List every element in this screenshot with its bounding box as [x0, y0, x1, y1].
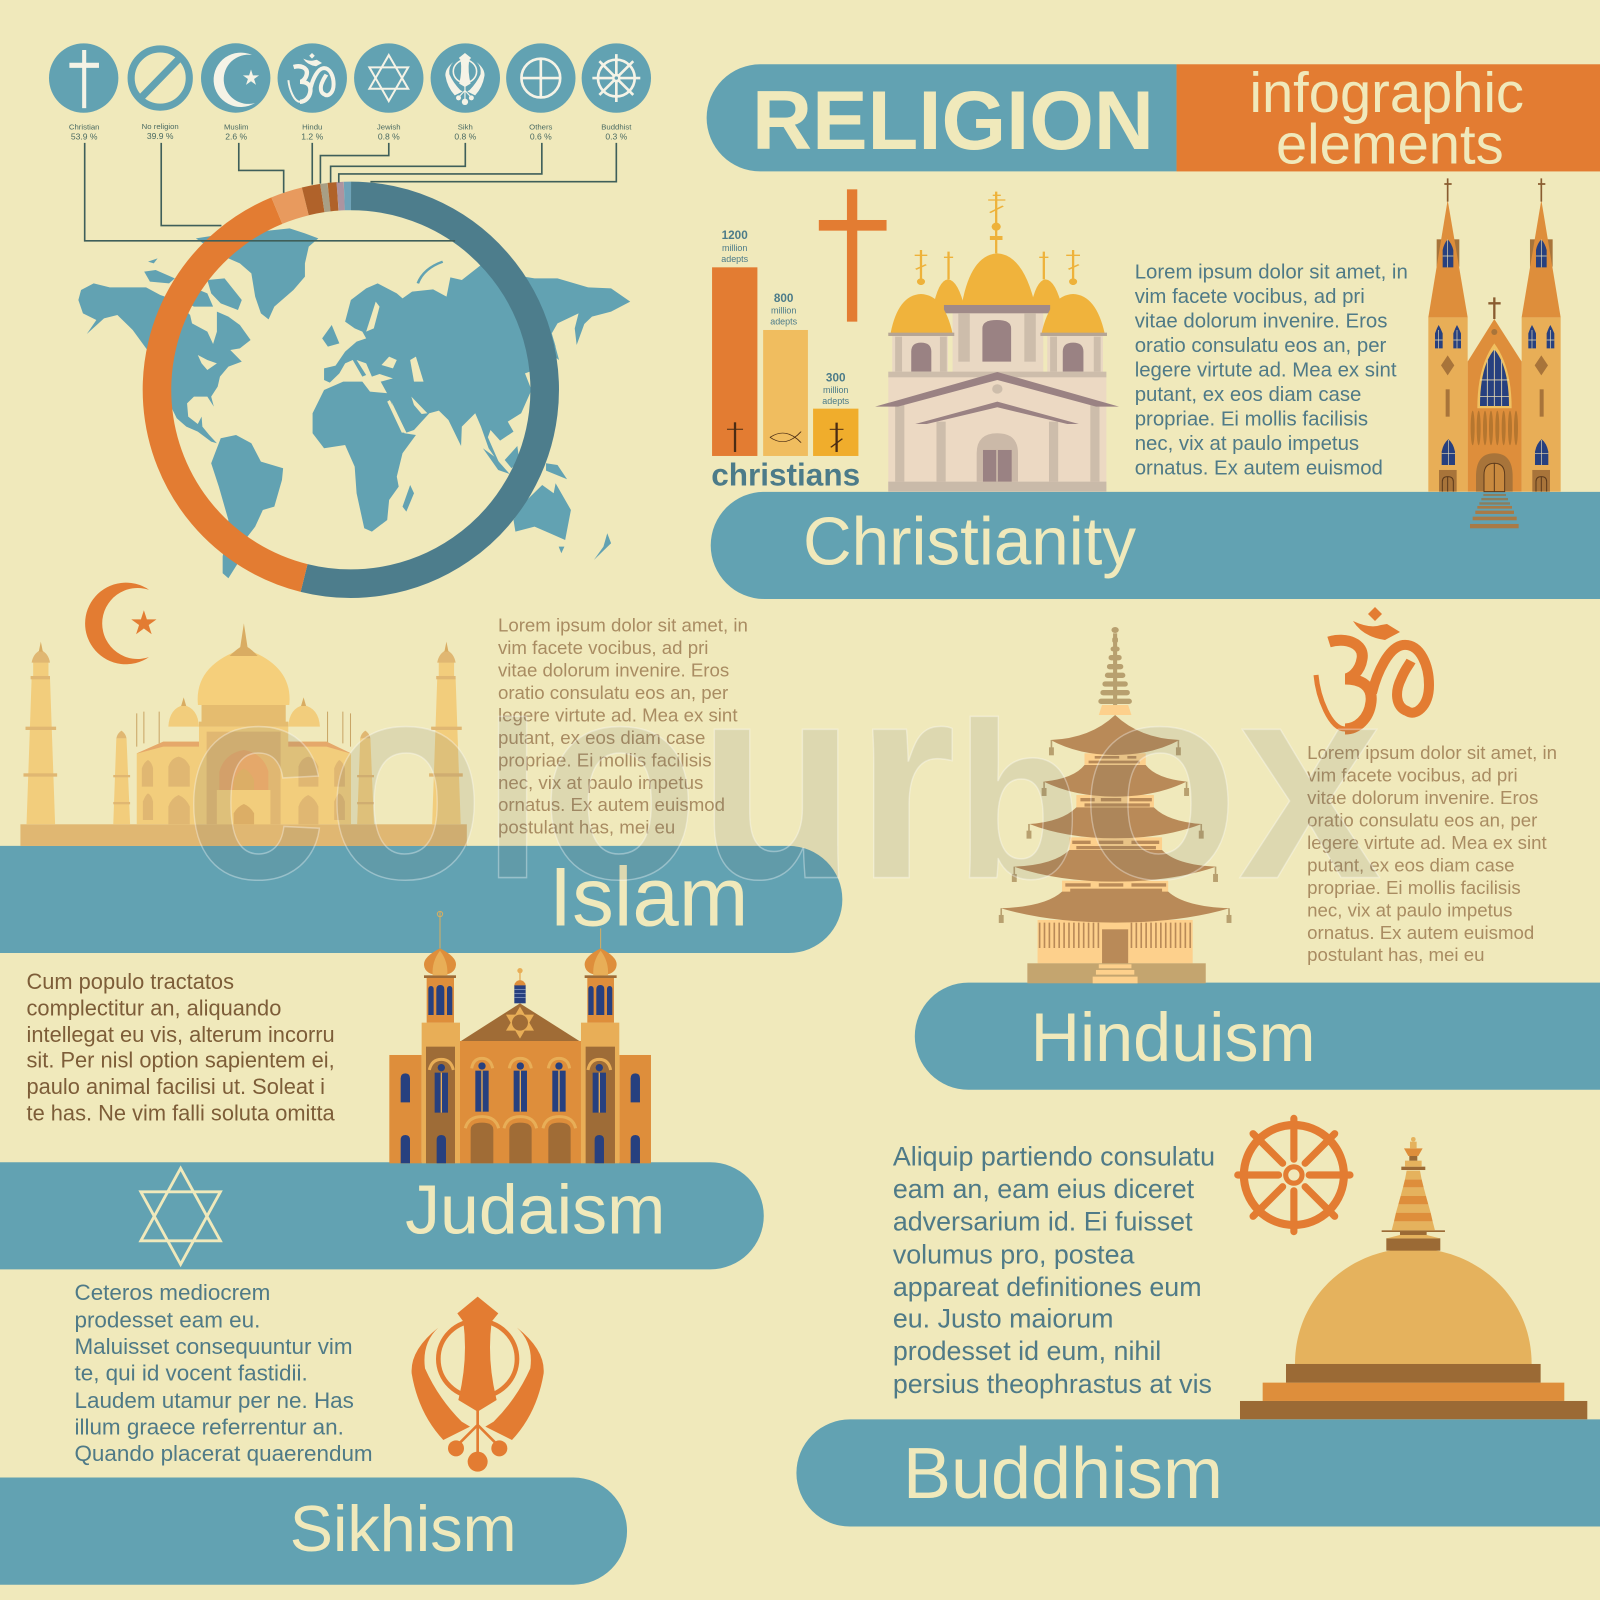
band: Islam [0, 846, 842, 953]
icon: khanda large [412, 1297, 544, 1472]
text block: Judaism: complectitur an, aliquando [27, 995, 281, 1020]
heading: Judaism: Judaism [405, 1171, 665, 1249]
icon: dharma wheel [582, 43, 651, 113]
bar labels: 800 [774, 292, 794, 305]
text block: Hinduism: vitae dolorum invenire. Eros [1307, 787, 1538, 808]
band: Buddhism [796, 1419, 1600, 1527]
bar labels: million [722, 243, 747, 253]
heading: Christianity: Christianity [803, 504, 1136, 579]
text block: Hinduism: propriae. Ei mollis facilisis [1307, 877, 1521, 898]
icon: no religion [131, 49, 189, 107]
text block: Hinduism: vim facete vocibus, ad pri [1307, 765, 1518, 786]
text block: Christianity: Lorem ipsum dolor sit amet, in [1135, 262, 1408, 284]
text block: Hinduism: Lorem ipsum dolor sit amet, in [1307, 742, 1557, 763]
text block: Christianity: propriae. Ei mollis facilisis [1135, 409, 1368, 431]
text block: Islam: nec, vix at paulo impetus [498, 772, 703, 793]
building: stupa [1240, 1137, 1587, 1419]
text block: Hinduism: legere virtute ad. Mea ex sint [1307, 832, 1548, 853]
text block: Buddhism: volumus pro, postea [893, 1239, 1135, 1269]
text block: Islam: vim facete vocibus, ad pri [498, 637, 708, 658]
text block: Buddhism: persius theophrastus at vis [893, 1369, 1212, 1399]
text block: Christianity: putant, ex eos diam case [1135, 384, 1361, 406]
band: Sikhism [0, 1478, 627, 1585]
icon labels: 1.2 % [301, 131, 324, 141]
icon labels: 53.9 % [71, 131, 98, 141]
donut chart: religion shares [157, 196, 545, 584]
text block: Islam: vitae dolorum invenire. Eros [498, 660, 729, 681]
icon labels: 2.6 % [225, 131, 248, 141]
text block: Sikhism: Ceteros mediocrem [74, 1280, 270, 1305]
watermark: colourbox: colourbox [184, 624, 1383, 938]
world map [78, 228, 630, 578]
building: synagogue [389, 911, 651, 1163]
building: orthodox church [875, 192, 1119, 492]
text block: Hinduism: oratio consulatu eos an, per [1307, 810, 1537, 831]
icon: circled cross [506, 43, 576, 113]
large cross [819, 189, 887, 322]
text block: Buddhism: appareat definitiones eum [893, 1272, 1202, 1302]
icon labels: 0.8 % [454, 131, 477, 141]
title: RELIGION: RELIGION [752, 74, 1154, 167]
text block: Sikhism: illum graece referrentur an. [74, 1415, 344, 1440]
building: gothic cathedral [1428, 178, 1561, 528]
text block: Buddhism: Aliquip partiendo consulatu [893, 1141, 1215, 1171]
icon labels: Hindu [302, 123, 322, 132]
text block: Judaism: paulo animal facilisi ut. Soleat i [27, 1074, 325, 1099]
text block: Christianity: vim facete vocibus, ad pri [1135, 286, 1365, 308]
text block: Sikhism [74, 1280, 373, 1466]
icon: cross [49, 43, 118, 113]
icon labels: Others [529, 123, 553, 132]
text block: Judaism: intellegat eu vis, alterum incorru [27, 1022, 335, 1047]
text block: Hinduism: nec, vix at paulo impetus [1307, 899, 1512, 920]
icon labels [69, 122, 632, 141]
icon: khanda [431, 43, 500, 113]
heading: Buddhism: Buddhism [903, 1434, 1223, 1514]
text block: Islam: propriae. Ei mollis facilisis [498, 749, 712, 770]
bar labels: 300 [826, 372, 846, 385]
heading: Islam: Islam [549, 850, 748, 944]
text block: Judaism: te has. Ne vim falli soluta omitta [27, 1100, 336, 1125]
bar labels: million [823, 385, 848, 395]
icon: om [278, 43, 347, 113]
icon: star of David large [141, 1168, 220, 1264]
icon: star of David [354, 43, 423, 113]
subtitle: infographic elements: infographic [1249, 61, 1524, 124]
text block: Hinduism: ornatus. Ex autem euismod [1307, 922, 1534, 943]
leader lines [85, 143, 616, 241]
bar chart: christians [711, 189, 887, 493]
text block: Judaism [27, 969, 336, 1125]
icon labels: Sikh [458, 123, 473, 132]
icon: crescent and star [201, 43, 270, 113]
text block: Christianity: oratio consulatu eos an, per [1135, 335, 1387, 357]
text block: Christianity: legere virtute ad. Mea ex sint [1135, 360, 1397, 382]
text block: Hinduism: putant, ex eos diam case [1307, 854, 1515, 875]
text block: Sikhism: Maluisset consequuntur vim [74, 1334, 353, 1359]
icon labels: 0.3 % [605, 131, 628, 141]
band: title right [1177, 64, 1600, 171]
bar labels: adepts [721, 254, 749, 264]
icon labels: Christian [69, 123, 99, 132]
icon row: religion symbols [49, 43, 651, 113]
icon: crescent and star large [85, 583, 156, 664]
text block: Islam: oratio consulatu eos an, per [498, 682, 728, 703]
icon: dharma wheel large [1238, 1118, 1350, 1232]
text block: Islam: postulant has, mei eu [498, 817, 675, 838]
subtitle: infographic elements: elements [1276, 112, 1504, 175]
text block: Judaism: Cum populo tractatos [27, 969, 234, 994]
text block: Christianity: ornatus. Ex autem euismod [1135, 457, 1383, 479]
bar labels: 1200 [722, 229, 748, 242]
bars [712, 267, 858, 456]
icon labels: 39.9 % [147, 131, 174, 141]
icon labels: 0.8 % [378, 131, 400, 141]
text block: Christianity: vitae dolorum invenire. Eros [1135, 311, 1387, 333]
icon labels: No religion [142, 122, 179, 131]
band: Hinduism [915, 983, 1600, 1090]
text block: Buddhism [893, 1141, 1215, 1399]
chart caption: christians [711, 457, 860, 493]
band: Christianity [711, 492, 1600, 599]
text block: Islam [498, 615, 748, 838]
icon labels: Buddhist [601, 123, 632, 132]
text block: Buddhism: eu. Justo maiorum [893, 1304, 1114, 1334]
bar icons [727, 422, 844, 452]
text block: Sikhism: Laudem utamur per ne. Has [74, 1388, 354, 1413]
bar labels: million [771, 305, 796, 315]
text block: Islam: Lorem ipsum dolor sit amet, in [498, 615, 748, 636]
text block: Sikhism: te, qui id vocent fastidii. [74, 1361, 308, 1386]
heading: Sikhism: Sikhism [290, 1492, 517, 1565]
text block: Hinduism: postulant has, mei eu [1307, 944, 1484, 965]
building: taj mahal [20, 623, 467, 846]
icon: om large [1316, 607, 1429, 729]
text block: Judaism: sit. Per nisl option sapientem ei, [27, 1047, 335, 1072]
subtitle: infographic elements [1249, 61, 1524, 175]
icon labels: 0.6 % [530, 131, 552, 141]
band: Judaism [0, 1162, 764, 1269]
text block: Sikhism: Quando placerat quaerendum [74, 1441, 373, 1466]
band: title left [707, 64, 1177, 171]
text block: Buddhism: prodesset id eum, nihil [893, 1336, 1161, 1366]
text block: Buddhism: eam an, eam eius diceret [893, 1174, 1195, 1204]
text block: Islam: putant, ex eos diam case [498, 727, 705, 748]
text block: Buddhism: adversarium id. Ei fuisset [893, 1207, 1193, 1237]
text block: Christianity: nec, vix at paulo impetus [1135, 433, 1359, 455]
bar labels [721, 229, 850, 406]
icon labels: Jewish [377, 123, 401, 132]
text block: Sikhism: prodesset eam eu. [74, 1308, 260, 1333]
heading: Hinduism: Hinduism [1031, 1000, 1316, 1076]
text block: Islam: ornatus. Ex autem euismod [498, 794, 725, 815]
bar labels: adepts [822, 396, 850, 406]
building: pagoda [999, 627, 1231, 983]
icon labels: Muslim [224, 123, 248, 132]
text block: Christianity [1135, 262, 1408, 479]
text block: Hinduism [1307, 742, 1557, 965]
bar labels: adepts [770, 316, 798, 326]
text block: Islam: legere virtute ad. Mea ex sint [498, 704, 738, 725]
